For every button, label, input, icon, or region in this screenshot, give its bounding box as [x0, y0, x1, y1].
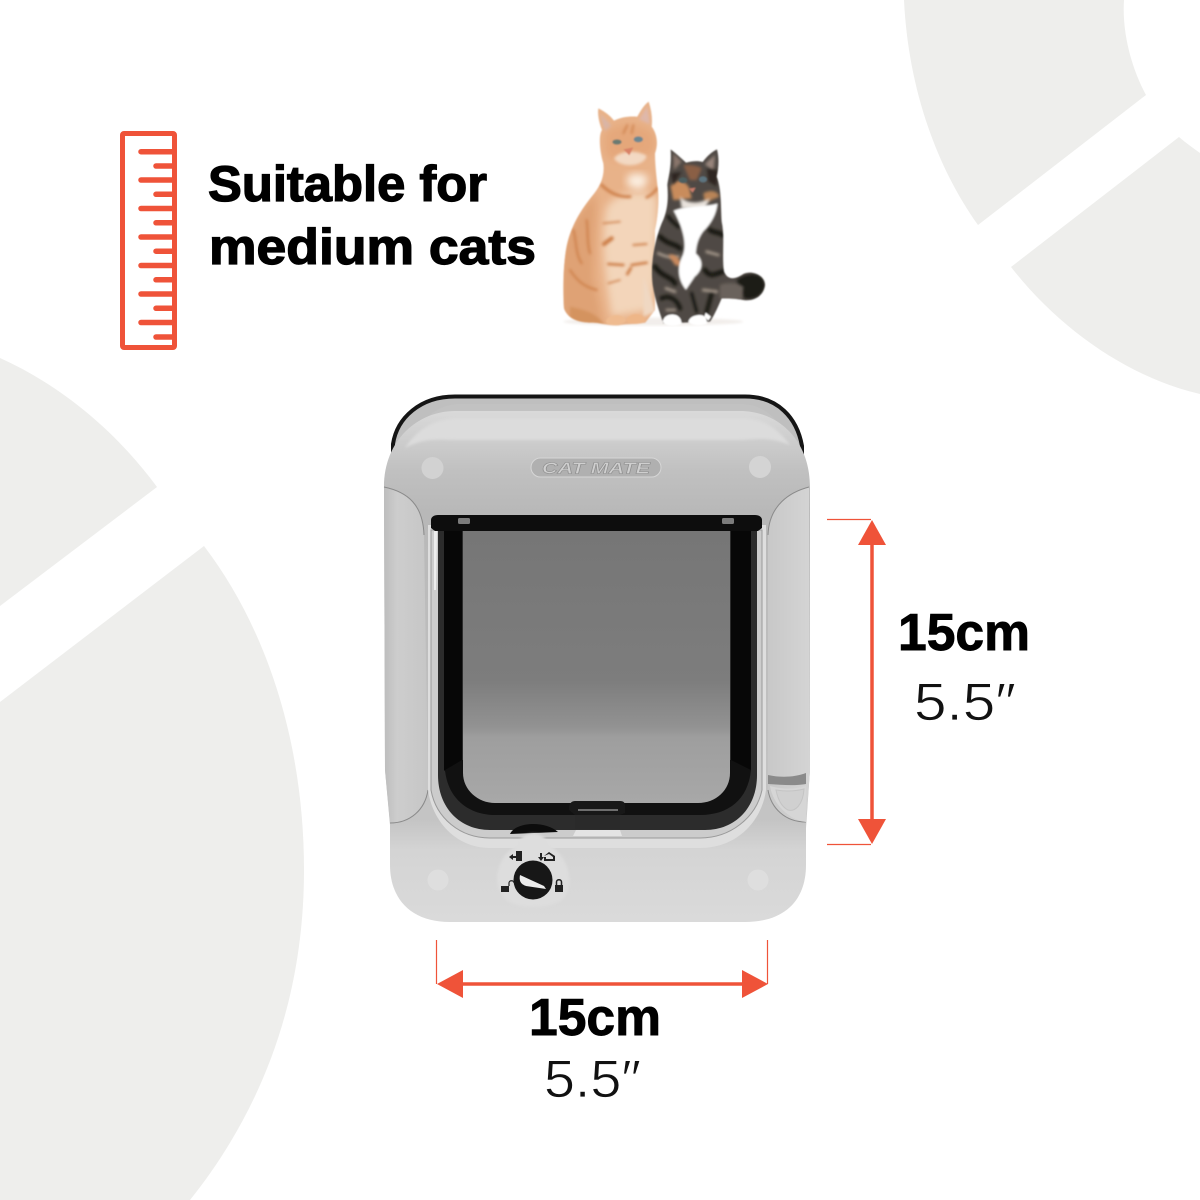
eyes and nose: [612, 139, 622, 145]
head patches: [683, 165, 702, 180]
ears: [600, 115, 611, 130]
ground shadow: [563, 318, 743, 326]
mounting screws: [422, 456, 771, 890]
rear housing and seal: [393, 396, 802, 470]
locking dial: [497, 834, 569, 907]
width label: 5.5″: [544, 1050, 641, 1109]
height dimension arrow: [827, 520, 886, 844]
height label: 5.5″: [914, 673, 1016, 732]
head: [606, 126, 654, 158]
width dimension arrow: [436, 940, 768, 998]
white bib: [673, 203, 718, 290]
height label: 15cm: [898, 604, 1030, 662]
icon: ruler: [122, 134, 174, 348]
illustration: two cats: [560, 102, 765, 326]
brand badge: [531, 458, 661, 478]
brand badge: CAT MATE: [542, 460, 652, 478]
orange cat: [560, 102, 658, 325]
width label: 15cm: [529, 989, 661, 1047]
white paws: [663, 315, 681, 326]
heading: suitable for medium cats: medium cats: [209, 219, 536, 275]
heading: suitable for medium cats: Suitable for: [208, 156, 487, 212]
back shading: [563, 198, 602, 319]
latch: [768, 773, 806, 822]
chest light: [604, 193, 657, 317]
stripes: [570, 125, 657, 290]
tabby cat: [652, 149, 765, 326]
heading: suitable for medium cats: [208, 156, 536, 275]
illustration: cat flap product: [384, 396, 810, 922]
side panels: [384, 487, 810, 823]
dial mode icons: [501, 851, 563, 892]
height label: [898, 604, 1030, 732]
flap handle: [569, 801, 625, 815]
markings: [655, 217, 723, 312]
flap glass pane: [463, 531, 730, 803]
width label: [529, 989, 661, 1109]
main body: [384, 411, 810, 922]
front paws: [606, 315, 626, 325]
flap window frame: [428, 525, 766, 848]
